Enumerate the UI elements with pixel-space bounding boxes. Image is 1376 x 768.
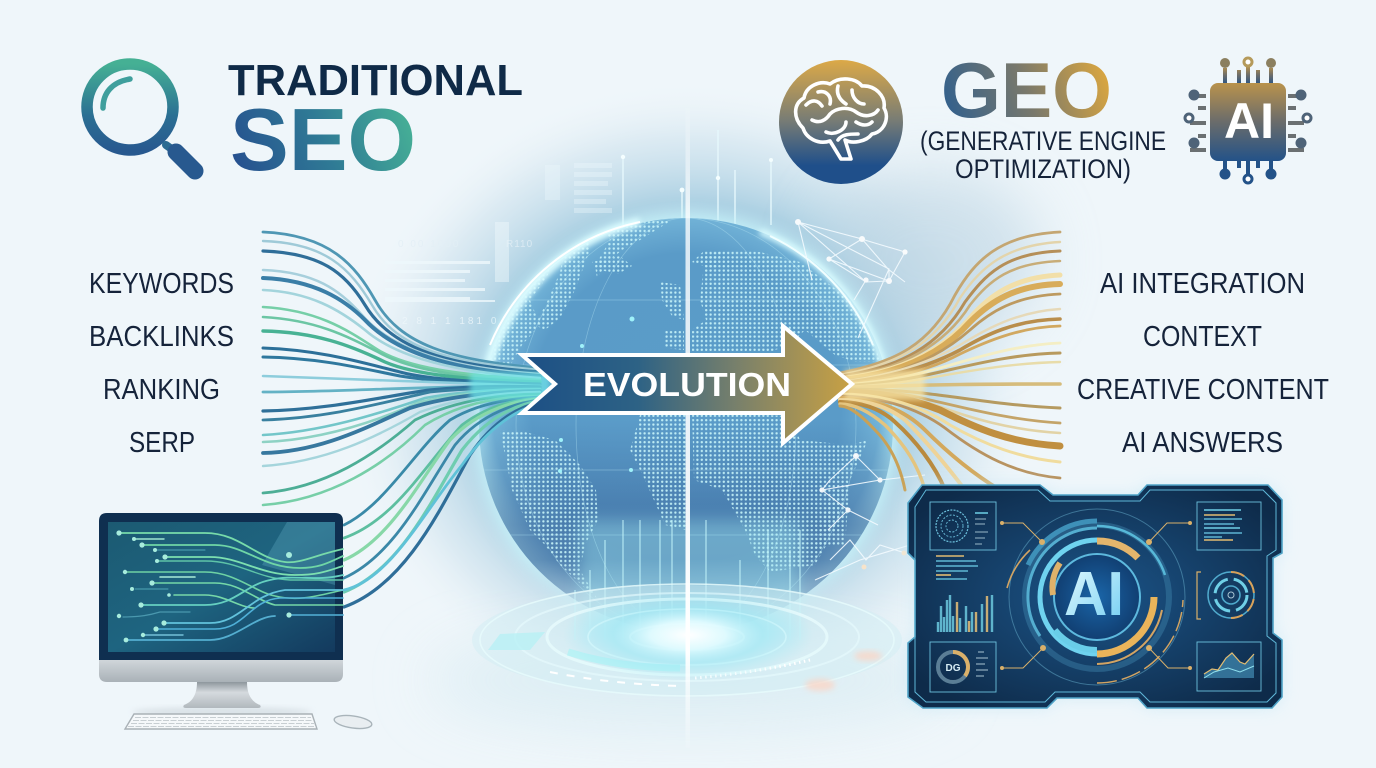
base rings: [480, 584, 894, 696]
right concept list: CREATIVE CONTENT: [1077, 374, 1329, 406]
center divider line: [686, 108, 690, 748]
icon: magnifying glass: [87, 64, 195, 171]
monitor stand: [183, 682, 261, 708]
monitor body: [99, 513, 343, 660]
arrow label: EVOLUTION: [583, 366, 791, 403]
data backdrop above and left of globe: [385, 163, 612, 327]
title: GEO: (GENERATIVE ENGINE: [920, 126, 1166, 156]
desktop computer: [99, 513, 373, 731]
panel: bars and chart: [936, 556, 992, 632]
keyboard: [125, 714, 317, 729]
AI rings: [1007, 509, 1185, 685]
panel: area chart: [1197, 642, 1261, 691]
panel: radar: [1197, 572, 1254, 619]
light columns and holographic base: [472, 520, 902, 696]
right concept list: AI ANSWERS: [1122, 427, 1283, 459]
network lines right side: [795, 219, 925, 580]
title: GEO: GEO: [941, 46, 1112, 134]
screen code lines: [116, 530, 343, 642]
panel: donut gauge: [930, 642, 996, 692]
connector lines: [1000, 521, 1192, 670]
globe sparkles: [558, 316, 634, 473]
AI label: AI: [1064, 560, 1124, 629]
bright limb: [482, 222, 890, 400]
AI dashboard: [908, 485, 1282, 708]
data backdrop above and left of globe: 0 00 1000: [398, 239, 460, 250]
left flowing strands: [263, 232, 550, 607]
data backdrop above and left of globe: R110: [506, 239, 533, 250]
icon: AI chip: AI: [1224, 93, 1274, 149]
left keyword list: KEYWORDS: [89, 268, 234, 300]
data backdrop above and left of globe: 2 8 1 1 181 0: [402, 316, 499, 327]
right concept list: AI INTEGRATION: [1100, 268, 1305, 300]
left keyword list: BACKLINKS: [89, 321, 234, 353]
title: traditional SEO: TRADITIONAL: [228, 57, 523, 105]
left keyword list: RANKING: [103, 374, 220, 406]
panel: donut gauge: DG: [946, 663, 961, 674]
panel: brain scan: [930, 502, 996, 550]
icon: brain circle: [779, 60, 903, 184]
left keyword list: [89, 268, 234, 459]
right flowing strands: [840, 232, 1060, 490]
left keyword list: SERP: [129, 427, 195, 459]
title: GEO: [920, 46, 1166, 184]
title: traditional SEO: [228, 57, 523, 189]
panel: text bars: [1197, 502, 1261, 550]
right concept list: [1077, 268, 1329, 459]
vertical light traces: [621, 130, 773, 225]
evolution arrow: [522, 326, 852, 443]
icon: AI chip: [1185, 58, 1311, 183]
title: GEO: OPTIMIZATION): [955, 154, 1131, 184]
dotted continents: [482, 220, 880, 600]
mouse: [333, 713, 373, 731]
title: traditional SEO: SEO: [230, 90, 416, 189]
globe: [474, 213, 898, 637]
right concept list: CONTEXT: [1143, 321, 1262, 353]
grid lines on globe: [484, 218, 888, 590]
background glow: [340, 80, 1040, 730]
